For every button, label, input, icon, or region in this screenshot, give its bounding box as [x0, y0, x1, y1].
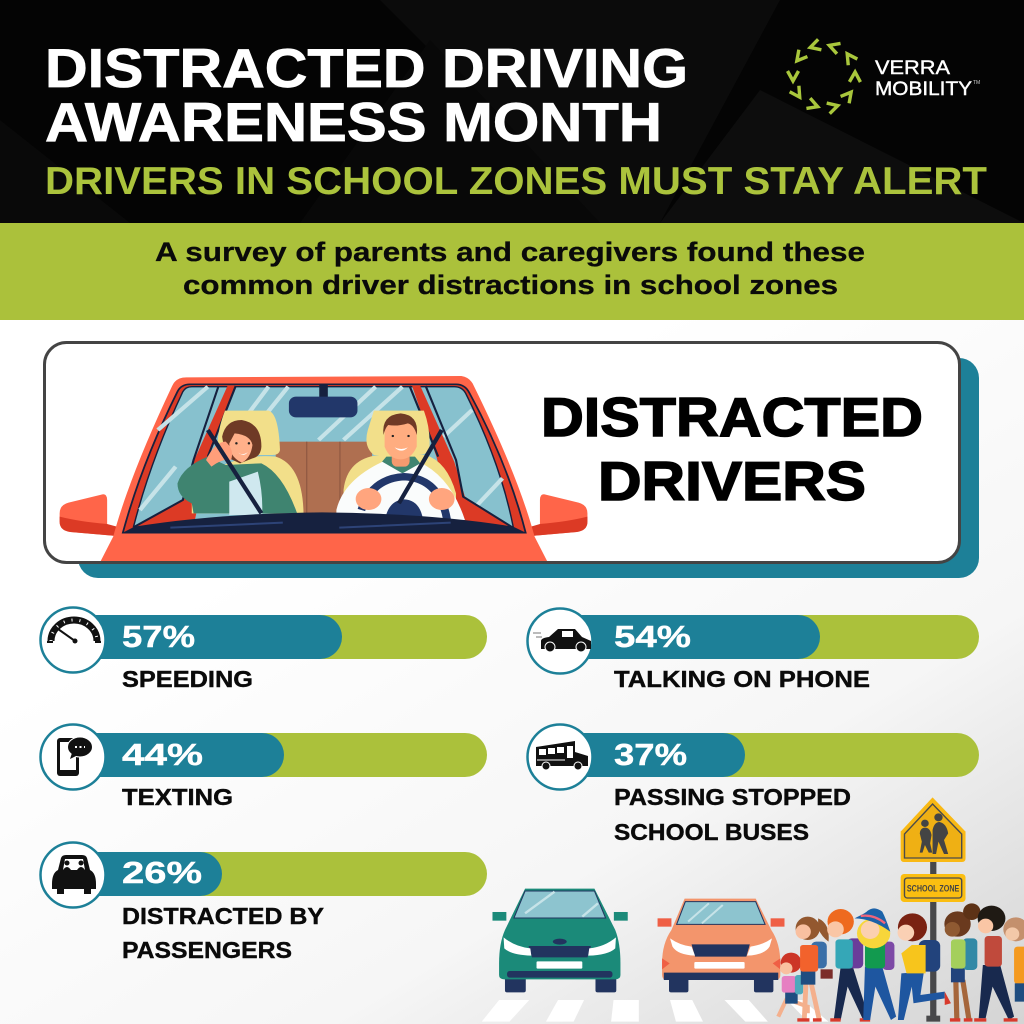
logo: Verra Mobility: VERRA: [875, 58, 950, 79]
teal car: [492, 889, 628, 992]
logo: Verra Mobility: MOBILITY: [875, 79, 972, 100]
boy with orange hair: [827, 909, 870, 1020]
school crossing sign: SCHOOL ZONE: [907, 883, 959, 893]
small child: [778, 953, 808, 1017]
stat: passing stopped school buses 37%: PASSING STOPPED: [614, 784, 851, 810]
illustration: red car with two occupants: [60, 376, 587, 561]
girl with blue hat: [855, 908, 896, 1020]
stat: texting 44%: TEXTING: [122, 784, 233, 810]
girl at right edge: [1003, 917, 1024, 1002]
title: DISTRACTED DRIVING: [45, 37, 688, 99]
logo: Verra Mobility: [788, 39, 980, 114]
girl with dark skin: [944, 911, 977, 1020]
passenger: [177, 411, 304, 515]
title: AWARENESS MONTH: [45, 91, 662, 153]
school crossing sign: [901, 797, 966, 1022]
girl with ponytail: [796, 917, 833, 1020]
stat: texting 44%: [40, 724, 487, 810]
header panel: [0, 0, 1024, 223]
icon: phone with chat bubble: [40, 724, 106, 790]
crosswalk stripes: [482, 1000, 829, 1022]
stat: talking on phone 54%: 54%: [614, 619, 691, 654]
boy with yellow shirt: [898, 913, 951, 1020]
survey intro band: [0, 223, 1024, 320]
icon: speedometer: [40, 608, 106, 672]
stat: distracted by passengers 26%: DISTRACTED BY: [122, 903, 324, 929]
panel: distracted drivers banner: [44, 342, 979, 578]
icon: car side view: [528, 608, 592, 674]
title: [45, 37, 688, 153]
stat: passing stopped school buses 37%: [528, 724, 979, 845]
stat: talking on phone 54%: [528, 608, 979, 692]
heading: distracted drivers: [541, 386, 923, 512]
heading: distracted drivers: DISTRACTED: [541, 386, 923, 448]
stat: distracted by passengers 26%: 26%: [122, 855, 202, 890]
stat: distracted by passengers 26%: [40, 842, 487, 963]
survey intro band: common driver distractions in school zones: [183, 270, 838, 300]
stat: passing stopped school buses 37%: 37%: [614, 737, 687, 772]
logo: Verra Mobility: TM: [973, 80, 980, 86]
illustration: school zone street scene: [482, 797, 1024, 1022]
driver: [336, 411, 465, 520]
girl with hair bun: [963, 903, 1018, 1020]
orange car: [658, 899, 784, 992]
stat: talking on phone 54%: TALKING ON PHONE: [614, 666, 870, 692]
heading: distracted drivers: DRIVERS: [598, 450, 866, 512]
stat: speeding 57%: [40, 608, 487, 692]
group of school children: [778, 903, 1024, 1020]
page background: [0, 320, 1024, 1024]
stat: speeding 57%: SPEEDING: [122, 666, 253, 692]
stat: distracted by passengers 26%: PASSENGERS: [122, 937, 292, 963]
stat: passing stopped school buses 37%: SCHOOL BUSES: [614, 819, 809, 845]
stat: texting 44%: 44%: [122, 737, 203, 772]
icon: school bus: [528, 724, 592, 790]
survey intro band: A survey of parents and caregivers found these: [155, 237, 865, 267]
stat: speeding 57%: 57%: [122, 619, 195, 654]
subtitle: DRIVERS IN SCHOOL ZONES MUST STAY ALERT: [45, 160, 987, 203]
icon: car front with passengers: [40, 842, 106, 908]
